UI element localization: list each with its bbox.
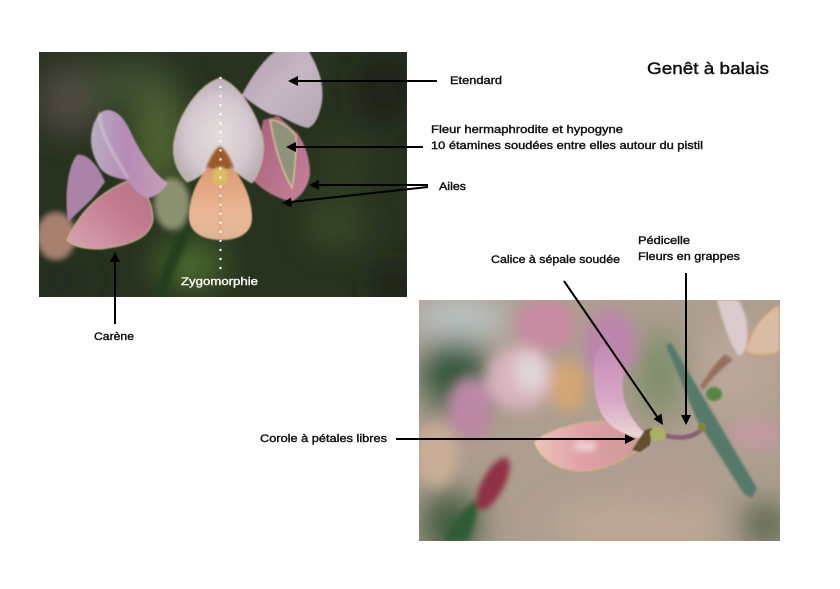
arrows: Ailes — [282, 180, 428, 208]
arrow: Pédicelle — [681, 273, 691, 425]
label: Pédicelle: Pédicelle — [638, 235, 690, 247]
line: axis of symmetry — [219, 78, 222, 272]
label: Fleur hermaphrodite: Fleur hermaphrodite et hypogyne — [431, 124, 623, 136]
blurred flowers at left — [36, 178, 192, 297]
label: Fleur hermaphrodite — [431, 124, 703, 152]
arrow: Corole — [396, 434, 635, 444]
photo: flower front view — [30, 50, 420, 305]
label: Pédicelle — [638, 235, 741, 263]
arrow: pistil — [286, 142, 423, 152]
photo: flower side view — [419, 300, 780, 541]
label: Etendard: Etendard — [450, 75, 502, 87]
label: Pédicelle: Fleurs en grappes — [638, 251, 741, 263]
arrow: Calice — [564, 281, 663, 425]
label: Carène: Carène — [94, 331, 134, 343]
title: Genêt à balais — [647, 59, 769, 78]
label: Fleur hermaphrodite: 10 étamines soudées entre elles autour du pistil — [431, 140, 703, 152]
label: Corole: Corole à pétales libres — [260, 433, 388, 445]
arrow: Carène — [110, 252, 120, 324]
label: Ailes: Ailes — [439, 181, 467, 193]
arrow: Etendard — [288, 76, 437, 86]
label: Calice: Calice à sépale soudée — [491, 254, 620, 266]
label: Zygomorphie: Zygomorphie — [181, 276, 258, 288]
